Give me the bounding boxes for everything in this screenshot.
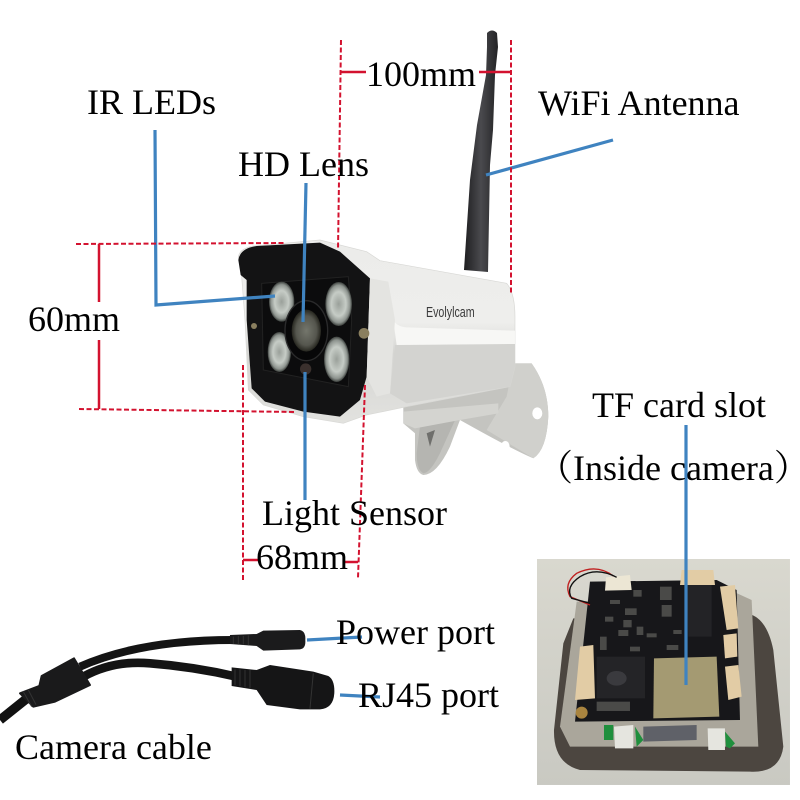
photo: inside camera circuit board — [537, 559, 790, 785]
dimension lines — [76, 40, 511, 580]
board components — [597, 587, 682, 711]
wires — [568, 569, 613, 605]
body shading panel — [390, 344, 515, 403]
front collar — [367, 278, 395, 397]
dimension: 100mm line — [341, 71, 511, 73]
icon: WiFi antenna — [464, 30, 498, 272]
leader: IR LEDs — [155, 130, 275, 305]
leader: Light Sensor — [303, 372, 307, 500]
blue leader lines — [155, 130, 686, 697]
label: 100mm: 100mm — [366, 54, 476, 94]
RJ45 connector — [232, 665, 334, 709]
leader: WiFi Antenna — [486, 140, 613, 175]
HD lens — [285, 301, 328, 361]
connectors — [575, 645, 595, 700]
IR LED bottom right — [324, 337, 349, 382]
IR LED bottom left — [268, 332, 291, 372]
IR LED top right — [325, 282, 352, 326]
label: Camera cable: Camera cable — [15, 727, 212, 767]
label: 60mm: 60mm — [28, 299, 120, 339]
dashed extension lines — [76, 40, 511, 580]
label: Power port: Power port — [336, 612, 495, 652]
dimension: 60mm line — [98, 244, 100, 409]
IR LED top left — [269, 282, 294, 322]
power connector — [230, 630, 305, 651]
light sensor — [300, 363, 311, 375]
camera cable — [0, 630, 334, 720]
brand label: Evolylcam — [426, 304, 475, 321]
camera sun shield — [238, 243, 370, 417]
label: WiFi Antenna: WiFi Antenna — [538, 83, 740, 123]
icon: wall mount bracket — [403, 363, 548, 475]
leader: HD Lens — [303, 183, 306, 322]
label: IR LEDs: IR LEDs — [87, 82, 216, 122]
dimension: 68mm line — [243, 560, 358, 562]
label: RJ45 port: RJ45 port — [358, 675, 499, 715]
leader: Power port — [307, 637, 362, 640]
label: TF card slot: TF card slot — [592, 385, 766, 425]
screws — [359, 328, 369, 339]
label: HD Lens: HD Lens — [238, 144, 369, 184]
leader: TF card slot — [684, 425, 688, 685]
label: 68mm: 68mm — [256, 537, 348, 577]
camera body — [238, 240, 515, 423]
leader: RJ45 port — [340, 695, 380, 697]
label: Light Sensor: Light Sensor — [262, 493, 447, 533]
